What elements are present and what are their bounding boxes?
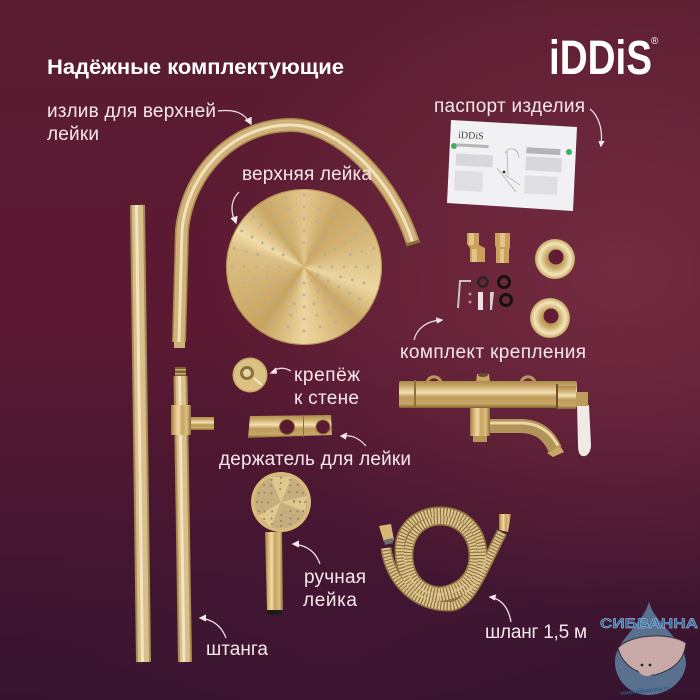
hose [379, 512, 511, 606]
arrow: passport [590, 109, 604, 146]
watermark: Sibvanna: СИБВАННА [600, 615, 698, 631]
arrow: top shower [231, 192, 239, 223]
arrow: hose [490, 595, 511, 622]
faucet mixer [399, 373, 591, 457]
passport booklet: iDDiS [458, 130, 484, 142]
label: spout second line: лейки [47, 124, 99, 145]
hand shower [251, 472, 311, 615]
label: hose: шланг 1,5 м [485, 622, 587, 643]
rings, key and anchors [458, 276, 512, 310]
brass fittings [467, 233, 510, 263]
label: hand shower second line: лейка [303, 590, 357, 611]
label: passport: паспорт изделия [434, 96, 585, 117]
gooseneck spout [174, 125, 420, 348]
label: holder: держатель для лейки [219, 449, 411, 470]
down pipe [470, 406, 490, 436]
label: rod: штанга [206, 639, 268, 660]
rod: right with slider [171, 367, 214, 662]
mounts [427, 377, 535, 382]
watermark: Sibvanna [600, 601, 698, 697]
arrow: wall mount [271, 368, 291, 373]
body [399, 381, 577, 408]
rod: left [136, 205, 144, 662]
passport booklet [447, 120, 577, 211]
flanges [530, 239, 575, 338]
mounting kit [458, 233, 575, 338]
label: top shower: верхняя лейка [242, 164, 372, 185]
shower holder [248, 415, 332, 438]
label: mounting kit: комплект крепления [400, 342, 586, 363]
white handle [577, 405, 591, 456]
title: Надёжные комплектующие [47, 56, 344, 79]
watermark: Sibvanna: www.sibvanna.ru [620, 686, 670, 697]
label: wall mount second line: к стене [294, 388, 359, 409]
spout [490, 426, 555, 449]
arrow: hand shower [293, 541, 320, 564]
logo: IDDIS: ® [651, 36, 659, 47]
logo: IDDIS: iDDiS [549, 32, 652, 85]
label: hand shower: ручная [304, 567, 366, 588]
label: spout: излив для верхней [47, 101, 216, 122]
arrow: mounting kit [414, 318, 442, 340]
coils [386, 512, 502, 606]
arrow: holder [341, 433, 366, 446]
arrow: rod [200, 615, 226, 638]
top shower head [226, 189, 382, 345]
hose ends [379, 524, 394, 542]
label: wall mount: крепёж [294, 365, 360, 386]
wall mount [232, 358, 268, 392]
arrow: spout [218, 110, 251, 124]
top nub [476, 374, 490, 383]
